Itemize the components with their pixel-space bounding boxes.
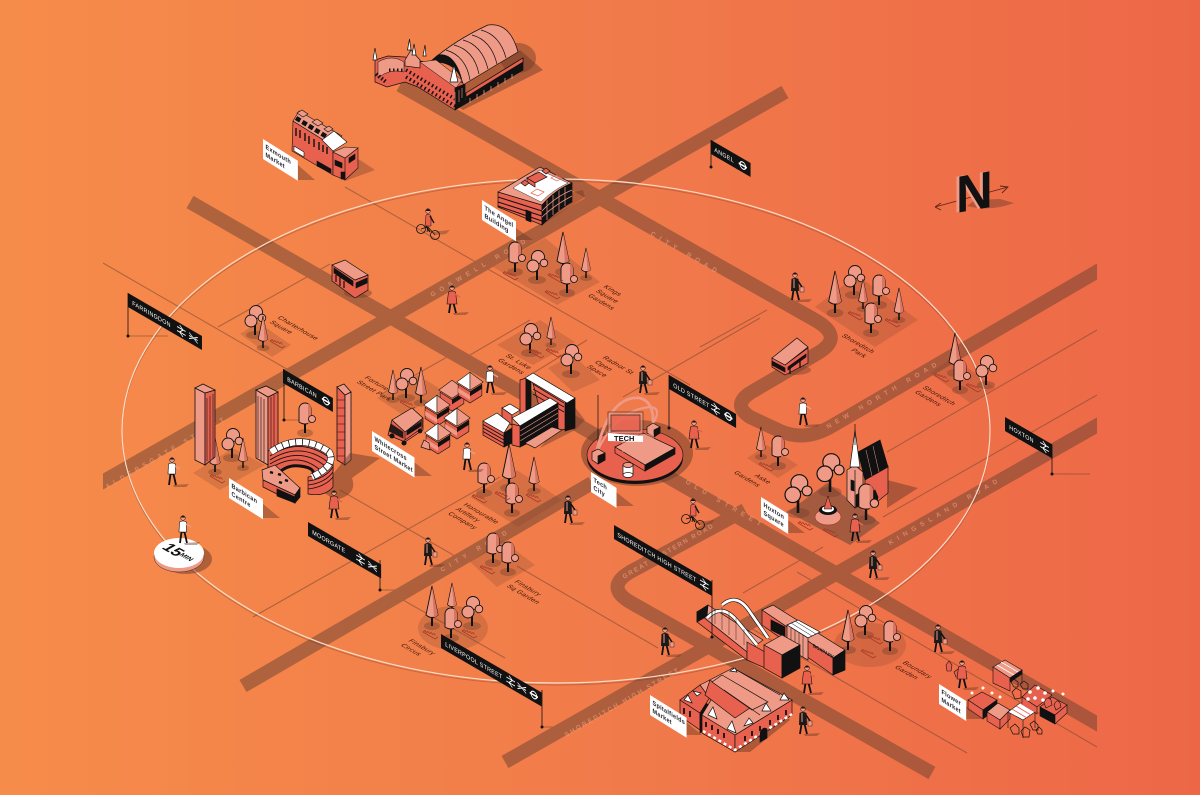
pedestrians — [168, 273, 979, 736]
garden: Honourable Artillery Company: Artillery — [453, 507, 482, 523]
sign: Hoxton: HOXTON — [1009, 424, 1034, 445]
card: Barbican Centre: Centre — [232, 491, 251, 509]
building: Spitalfields Market — [680, 668, 792, 752]
card: Hoxton Square — [761, 497, 805, 534]
road names: ALDERSGATE STREET — [104, 415, 229, 491]
card: The Angel Building: Building — [485, 213, 509, 235]
garden: Finsbury Sq Garden — [480, 533, 549, 605]
sign: Angel — [710, 140, 751, 177]
garden: Charterhouse Square: Charterhouse — [275, 315, 320, 341]
garden: Kings Square Gardens — [503, 232, 632, 311]
road names: CITY ROAD — [440, 527, 513, 574]
card: Hoxton Square: Hoxton — [764, 502, 784, 521]
sign: Old Street — [668, 375, 736, 430]
card: Flower Market: Market — [942, 697, 961, 716]
garden: St. Luke Gardens: Gardens — [495, 358, 526, 376]
walker on badge — [179, 516, 200, 545]
garden: Finsbury Sq Garden: Finsbury — [512, 579, 543, 597]
card: Barbican Centre — [229, 478, 280, 519]
road names: OLD STREET — [684, 479, 766, 530]
road names: SHOREDITCH HIGH STREET — [564, 666, 682, 739]
building: Hoxton church — [847, 424, 918, 508]
vehicle: food truck — [388, 408, 430, 450]
road names: NEW NORTH ROAD — [826, 359, 942, 431]
building: Exmouth Market — [292, 110, 375, 181]
garden: Aske Gardens: Gardens — [731, 470, 762, 488]
garden: Aske Gardens: Aske — [752, 473, 772, 485]
sign: Barbican — [282, 369, 333, 422]
garden: Shoreditch Park — [827, 266, 905, 359]
sign: Liverpool Street: LIVERPOOL STREET — [445, 641, 503, 681]
garden: Kings Square Gardens: Gardens — [586, 293, 616, 311]
garden: Boundary Garden: Garden — [892, 665, 920, 681]
road names: GOSWELL ROAD — [430, 236, 531, 299]
road names: KINGSLAND ROAD — [888, 476, 1003, 547]
road names: GREAT EASTERN ROAD — [622, 522, 716, 581]
garden: Hoxton Square trees and fountain — [785, 454, 879, 537]
road names — [104, 231, 1003, 739]
15 minute walking radius ring — [122, 179, 990, 685]
compass: north arrow: N — [956, 159, 993, 224]
Barbican garden trees — [208, 403, 316, 483]
badge: 15 min — [154, 538, 212, 574]
garden: Honourable Artillery Company: Company — [446, 511, 479, 531]
building: market stalls — [424, 372, 483, 454]
garden: Shoreditch Gardens — [912, 333, 997, 411]
bus: Goswell Road — [332, 260, 372, 298]
road names: CITY ROAD — [649, 231, 722, 277]
card: The Angel Building — [482, 200, 533, 241]
garden: Radnor St Open Space — [561, 344, 635, 385]
sign: Shoreditch High Street — [614, 525, 714, 638]
card: Whitecross Street Market: Street Market — [375, 444, 413, 475]
garden: Radnor St Open Space: Open — [592, 360, 614, 372]
sign: Shoreditch High Street: SHOREDITCH HIGH STREET — [617, 531, 697, 584]
building: Tech City — [581, 395, 693, 486]
garden: Finsbury Circus: Circus — [398, 643, 423, 657]
garden: Honourable Artillery Company — [446, 444, 541, 534]
market: Flower Market — [946, 660, 1067, 738]
Boxpark sign text: BOXPARK — [813, 643, 835, 661]
badge: 15 min: 15 — [158, 541, 188, 559]
garden: Hoxton Square paving — [788, 483, 880, 545]
sign: Liverpool Street — [441, 634, 544, 728]
card: Spitalfields Market — [650, 695, 702, 738]
sign: Old Street: OLD STREET — [673, 382, 710, 410]
sign: Barbican: BARBICAN — [287, 376, 317, 400]
badge: 15 min: MIN — [177, 552, 194, 562]
garden: Fortune Street Park — [354, 367, 428, 409]
card: Spitalfields Market: Market — [653, 708, 672, 727]
building: Barbican Centre — [262, 441, 380, 503]
garden: Shoreditch Gardens: Shoreditch — [920, 385, 957, 407]
card: Tech City: City — [594, 485, 605, 499]
road network — [90, 85, 1110, 773]
building: Barbican towers — [195, 384, 351, 465]
card: Hoxton Square: Square — [764, 510, 784, 529]
garden: Charterhouse Square — [245, 306, 320, 351]
card: Whitecross Street Market — [372, 431, 432, 478]
card: Exmouth Market: Exmouth — [266, 144, 291, 166]
garden: Charterhouse Square: Square — [267, 320, 294, 335]
garden: Radnor St Open Space: Space — [585, 364, 609, 378]
garden: Fortune Street Park: Street Park — [354, 380, 393, 402]
garden: Honourable Artillery Company: Honourable — [461, 502, 500, 525]
card: Tech City — [591, 472, 634, 508]
garden: Boundary Garden — [840, 606, 934, 684]
sign: Angel: ANGEL — [714, 146, 734, 165]
building: Shoreditch bridge and Boxpark — [697, 600, 845, 678]
buses: City Road — [772, 338, 811, 375]
garden: Shoreditch Park: Shoreditch — [839, 333, 876, 355]
sign: Farringdon: FARRINGDON — [132, 300, 171, 329]
card: Exmouth Market — [263, 139, 315, 181]
garden patches — [193, 238, 995, 667]
sign: Moorgate: MOORGATE — [312, 529, 345, 555]
card: Barbican Centre: Barbican — [232, 483, 257, 506]
card: The Angel Building: The Angel — [485, 205, 513, 230]
sign: Moorgate — [308, 522, 382, 592]
garden: Aske Gardens — [731, 427, 788, 490]
garden: Finsbury Circus: Finsbury — [406, 638, 437, 656]
card: Flower Market: Flower — [942, 689, 961, 708]
building: Tech City: TECH — [614, 434, 634, 443]
garden: Finsbury Sq Garden: Sq Garden — [504, 584, 541, 605]
card: Exmouth Market: Market — [266, 152, 285, 171]
garden: Fortune Street Park: Fortune — [362, 375, 390, 392]
building: The Angel Building — [498, 167, 585, 225]
building: St Pancras station — [373, 25, 543, 110]
card: Tech City: Tech — [594, 477, 607, 492]
cyclists — [416, 209, 715, 529]
card: Flower Market — [939, 684, 984, 721]
card: Spitalfields Market: Spitalfields — [653, 700, 685, 727]
sign: Hoxton — [1005, 417, 1054, 476]
compass: north arrow — [935, 159, 1014, 224]
compass: north arrow: N — [953, 159, 990, 224]
card: Whitecross Street Market: Whitecross — [375, 436, 407, 463]
garden: Kings Square Gardens: Kings — [601, 284, 623, 297]
garden: Boundary Garden: Boundary — [900, 660, 934, 680]
sign: Farringdon — [126, 293, 202, 350]
building: Old Street block — [483, 373, 585, 448]
garden: Finsbury Circus — [398, 583, 483, 661]
garden: St. Luke Gardens: St. Luke — [503, 353, 533, 371]
garden: Kings Square Gardens: Square — [593, 289, 620, 304]
garden: St. Luke Gardens — [495, 317, 561, 376]
garden: Radnor St Open Space: Radnor St — [600, 355, 635, 376]
garden: Shoreditch Gardens: Gardens — [912, 390, 943, 408]
garden: Shoreditch Park: Park — [849, 348, 868, 359]
